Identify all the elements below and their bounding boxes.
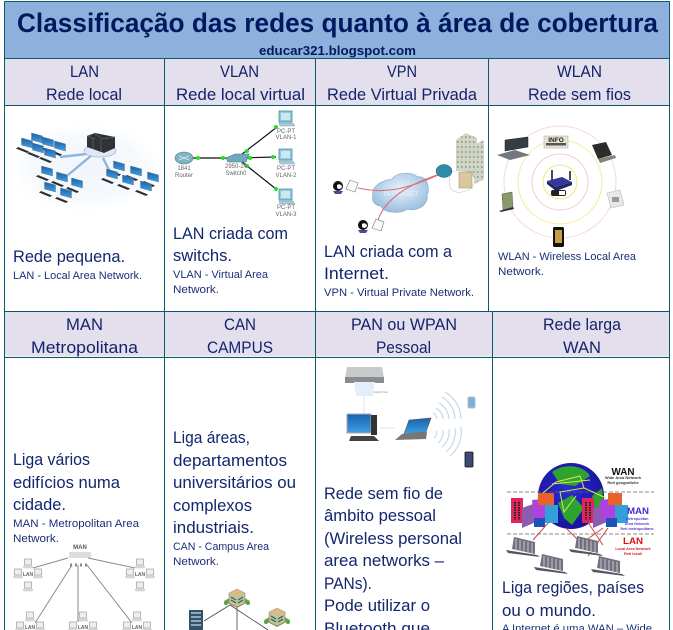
description: PAN: (Wireless personal [324,529,462,548]
description: WAN [502,578,644,620]
heading: CAN: CAN [224,316,256,334]
icon: MAN star topology [14,545,154,630]
heading: LAN: Rede local [46,86,122,104]
description: MAN: cidade. [13,495,66,514]
description: WAN: Liga regiões, países [502,578,644,597]
definition: MAN: Network. [13,533,59,545]
panel: WLAN [497,63,637,278]
icon: VLAN topology: VLAN-3 [275,212,297,218]
heading: VPN [327,63,478,104]
icon: MAN star topology: MAN [73,545,87,551]
icon: WAN, MAN and LAN layers: Reti geografiche [607,480,639,485]
description: VLAN: LAN criada com [173,224,288,243]
description: MAN: Liga vários [13,450,90,469]
icon: WAN, MAN and LAN layers: Metropolitan [626,517,649,521]
panel: MAN [13,316,154,630]
heading: VLAN: VLAN [220,63,259,81]
description: PAN: Rede sem fio de [324,484,443,503]
icon: WAN, MAN and LAN layers: Reti locali [624,552,642,556]
icon: VLAN topology: VLAN-2 [275,173,297,179]
icon: VLAN topology: Switch0 [225,171,247,177]
definition: CAN: CAN - Campus Area [173,541,270,553]
panel: LAN [11,63,163,282]
panel: WAN [502,316,654,630]
header backgrounds row 2 [4,312,670,356]
definition: VPN: VPN - Virtual Private Network. [324,287,474,299]
panel: PAN [324,316,475,630]
description: MAN [13,450,121,514]
definition: VLAN: Network. [173,284,219,296]
description: CAN [173,428,296,537]
heading: LAN [46,63,122,104]
icon: WAN, MAN and LAN layers: LAN [623,536,643,546]
heading: CAN [207,316,273,357]
heading: WLAN [528,63,631,104]
heading: WAN [543,316,622,357]
heading: VLAN [176,63,305,104]
panel: CAN [173,316,296,630]
icon: PAN devices: Inkjet Printer [374,391,388,394]
icon: WAN, MAN and LAN layers: Reti metropolitane [620,527,654,531]
heading: PAN [351,316,457,357]
icon: VPN diagram [333,133,484,233]
description: CAN: Liga áreas, [173,428,250,447]
heading: MAN [31,316,139,357]
icon: PAN devices [345,367,475,467]
heading: WLAN: WLAN [557,63,602,81]
definition: MAN [13,518,140,545]
icon: WLAN devices around router [497,126,624,247]
definition: VLAN: VLAN - Virtual Area [173,269,269,281]
heading: WAN: WAN [563,339,601,357]
heading: VLAN: Rede local virtual [176,86,305,104]
heading: VPN: Rede Virtual Privada [327,86,478,104]
icon: WAN, MAN and LAN layers [506,463,654,576]
definition: CAN: Network. [173,556,219,568]
description: PAN: Pode utilizar o [324,596,430,615]
heading: CAN: CAMPUS [207,339,273,357]
description: CAN: complexos [173,496,252,515]
icon: VLAN topology: VLAN-1 [275,135,297,141]
description: CAN: universitários ou [173,473,296,492]
description: VPN [324,242,453,283]
description: PAN: PANs). [324,574,372,593]
heading: VPN: VPN [387,63,417,81]
icon: VLAN topology: PC-PT [277,129,295,135]
icon: WAN, MAN and LAN layers: Wide Area Network [605,475,642,480]
heading: MAN: MAN [66,316,103,334]
definition: WLAN: WLAN - Wireless Local Area [498,251,637,263]
title: Classificação das redes quanto à área de cobertura [17,8,659,38]
heading: PAN: PAN ou WPAN [351,316,457,334]
title banner [4,2,670,58]
description: CAN: industriais. [173,518,254,537]
panel: VPN [324,63,484,299]
icon: campus buildings [189,589,290,630]
definition: WLAN [498,251,637,278]
description: WAN: ou o mundo. [502,601,596,620]
description: LAN: Rede pequena. [13,247,125,266]
icon: WAN, MAN and LAN layers: WAN [612,467,634,478]
definition: LAN: LAN - Local Area Network. [13,270,142,282]
icon: VLAN topology: 2950-24 [225,164,248,170]
heading: PAN: Pessoal [376,339,431,357]
icon: WAN, MAN and LAN layers: MAN [627,506,649,516]
description: CAN: departamentos [173,451,287,470]
icon: LAN network diagram [11,124,163,212]
definition: CAN [173,541,270,568]
definition: MAN: MAN - Metropolitan Area [13,518,140,530]
source url: educar321.blogspot.com [259,44,416,58]
icon: WLAN devices around router: INFO [548,137,564,144]
definition: VLAN [173,269,269,296]
icon: WAN, MAN and LAN layers: Local Area Network [615,547,652,551]
description: VLAN [173,224,288,265]
heading: LAN: LAN [70,63,99,81]
heading: MAN: Metropolitana [31,339,139,357]
icon: VLAN topology: PC-PT [277,166,295,172]
heading: WAN: Rede larga [543,316,622,334]
description: VPN: LAN criada com a [324,242,453,261]
icon: VLAN topology: 1841 [177,166,191,172]
description: VLAN: switchs. [173,246,232,265]
description: PAN: area networks – [324,551,445,570]
description: VPN: Internet. [324,264,389,283]
description: PAN [324,484,462,630]
description: PAN: âmbito pessoal [324,506,436,525]
heading: WLAN: Rede sem fios [528,86,631,104]
icon: VLAN topology [175,111,297,218]
icon: VLAN topology: Router [175,173,193,179]
icon: VPN diagram: INTERNET [384,191,419,198]
definition: WLAN: Network. [498,266,544,278]
icon: WAN, MAN and LAN layers: Area Network [625,522,650,526]
description: MAN: edifícios numa [13,473,121,492]
panel: VLAN [173,63,305,296]
icon: VLAN topology: PC-PT [277,205,295,211]
header backgrounds row 1 [4,58,670,106]
